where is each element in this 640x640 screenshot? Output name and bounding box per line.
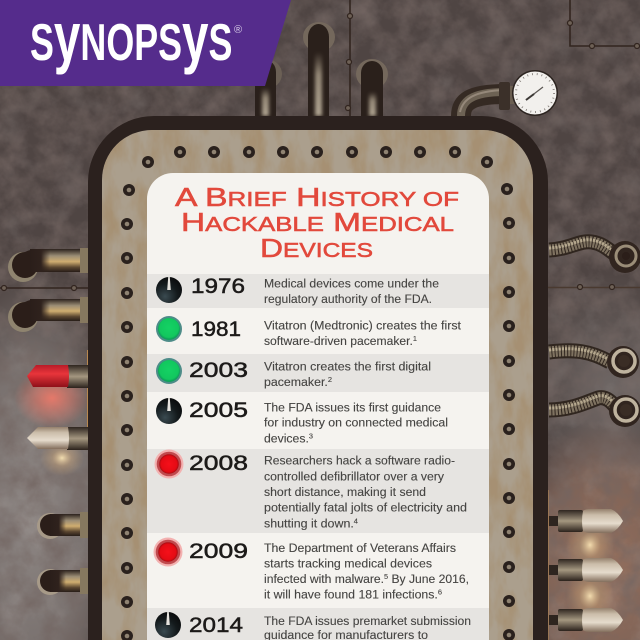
title: H ACKABLE M EDICAL — [181, 207, 454, 237]
row 1981: 1 — [413, 334, 417, 343]
title: A B RIEF H ISTORY OF — [175, 182, 459, 212]
row 2014: The FDA issues premarket submission — [264, 614, 471, 628]
row 2009: starts tracking medical devices — [264, 556, 432, 570]
wires — [0, 0, 640, 290]
row 2009: By June 2016, — [388, 572, 469, 586]
row 2014 — [147, 608, 489, 640]
bulb 2 — [549, 558, 623, 582]
gauge — [460, 70, 558, 116]
row 2005: 3 — [309, 432, 313, 440]
row 1976: 1976 — [191, 275, 245, 298]
pipe 2 — [303, 22, 335, 116]
row 2003 — [147, 354, 489, 392]
row 2005: The FDA issues its first guidance — [264, 400, 441, 414]
row 2008: controlled defibrillator over a very — [264, 470, 445, 484]
pipe 3 — [356, 59, 388, 116]
rivets — [121, 146, 515, 640]
bulb 1 — [549, 509, 623, 533]
row 1976: regulatory authority of the FDA. — [264, 292, 432, 306]
row 1981: Vitatron (Medtronic) creates the first — [264, 318, 462, 332]
purple banner — [0, 0, 291, 86]
gauge pipe — [460, 90, 505, 116]
row 2009 — [154, 538, 469, 602]
timeline — [147, 274, 489, 640]
row 2008 — [147, 449, 489, 533]
row 2009: 6 — [438, 588, 442, 596]
row 1981: 1981 — [191, 318, 241, 341]
row 2008: 2008 — [189, 452, 248, 475]
left bulbs — [14, 350, 90, 476]
row 2009: The Department of Veterans Affairs — [264, 541, 456, 555]
row 2008: shutting it down. — [264, 516, 354, 530]
left pipes — [8, 248, 88, 595]
top pipes — [250, 22, 388, 116]
red bulb — [27, 365, 88, 388]
row 2003: 2 — [328, 375, 332, 384]
row 1981: software-driven pacemaker. — [264, 334, 416, 348]
row 1976 — [147, 274, 489, 308]
row 2005: for industry on connected medical — [264, 416, 448, 430]
row 2003: 2003 — [189, 359, 248, 382]
row 2009: 2009 — [189, 540, 248, 563]
machine frame — [88, 116, 548, 640]
row 2009: 5 — [384, 572, 388, 581]
row 2003: pacemaker. — [264, 375, 328, 389]
row 2003: Vitatron creates the first digital — [264, 360, 431, 374]
row 2008: Researchers hack a software radio- — [264, 454, 455, 468]
row 1981 — [156, 316, 462, 348]
row 2005: 2005 — [189, 399, 248, 422]
row 1976: Medical devices come under the — [264, 276, 439, 290]
right corrugated hoses — [549, 240, 640, 427]
row 2005 — [156, 398, 448, 446]
right bulbs — [546, 490, 623, 640]
logo: synopsys: ® — [234, 24, 242, 36]
bulb 3 — [549, 608, 623, 632]
row 2008: 4 — [354, 516, 358, 526]
row 2009: infected with malware. — [264, 572, 387, 586]
title: DEVICES — [260, 233, 373, 263]
pipe 1 — [250, 59, 282, 116]
row 2014: 2014 — [189, 614, 243, 637]
row 2009: it will have found 181 infections. — [264, 588, 439, 602]
clear bulb — [27, 427, 88, 450]
row 2008: potentially fatal jolts of electricity and — [264, 500, 467, 514]
row 2008: short distance, making it send — [264, 485, 426, 499]
title — [175, 182, 459, 263]
white panel — [147, 173, 489, 640]
row 2005: devices. — [264, 432, 309, 446]
